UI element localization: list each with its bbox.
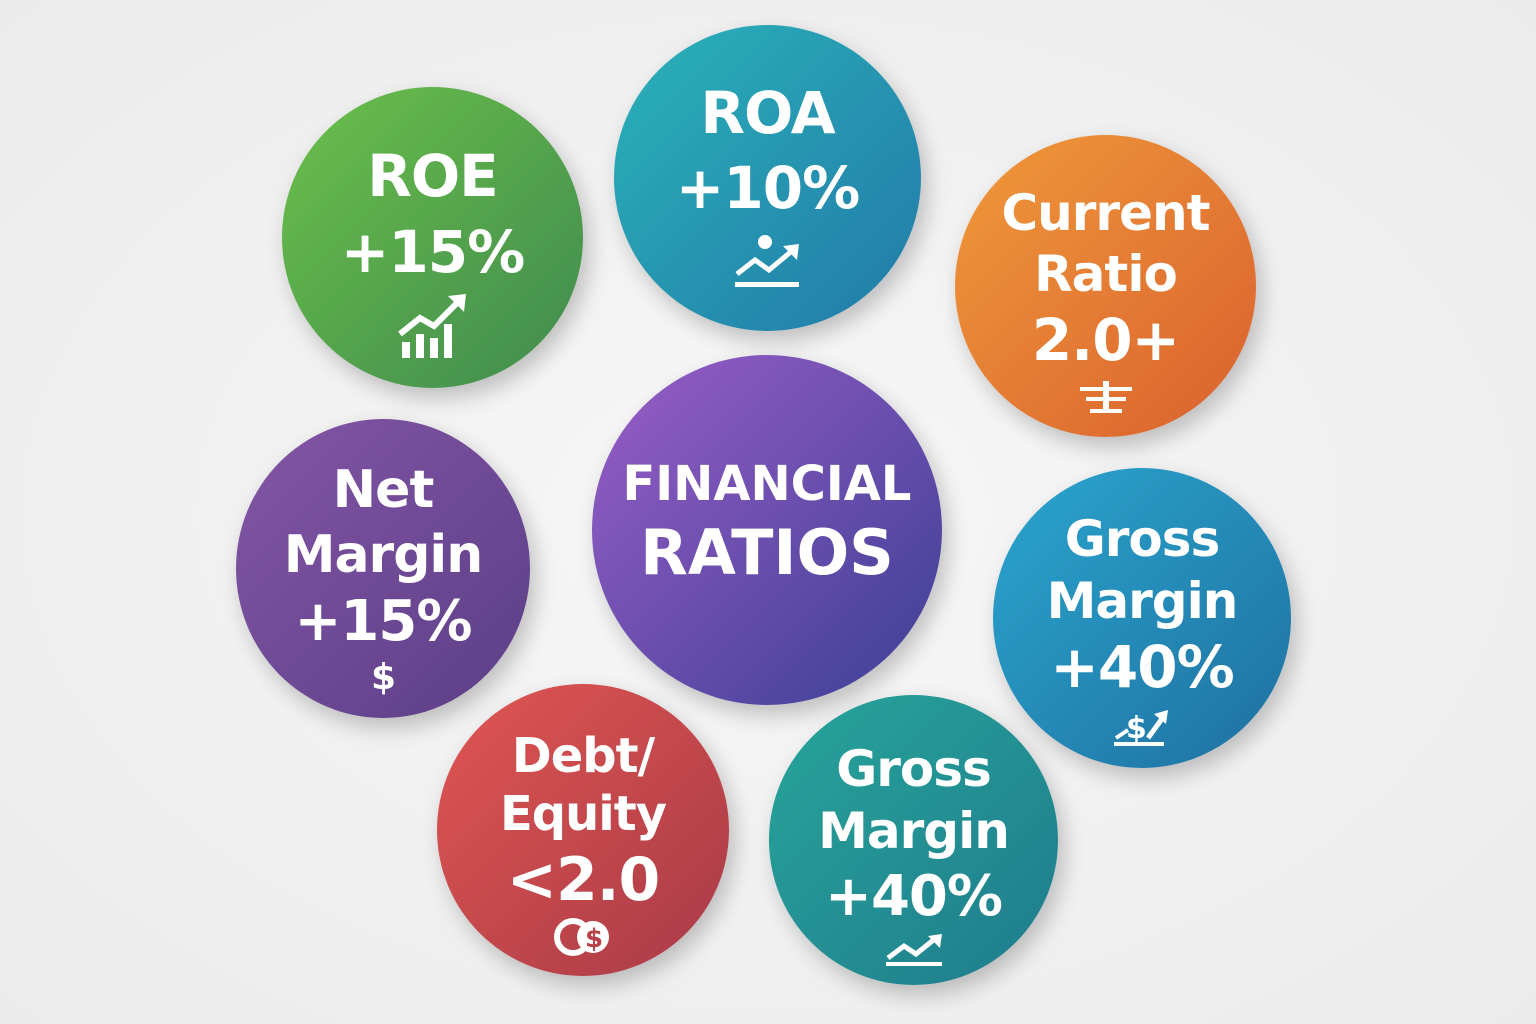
- icon: coins: $: [585, 924, 602, 954]
- text: Gross Margin +40%: Gross: [836, 740, 991, 798]
- text: Debt/Equity <2.0: Equity: [500, 786, 666, 842]
- text: Current Ratio 2.0+: Current: [1001, 184, 1210, 242]
- text: Current Ratio 2.0+: 2.0+: [1032, 306, 1179, 374]
- text: Net Margin +15%: Margin: [284, 525, 482, 585]
- title: Financial Ratios: FINANCIAL: [623, 456, 911, 512]
- text: ROE +15%: [341, 142, 524, 286]
- text: Gross Margin +40%: [818, 740, 1009, 929]
- text: Gross Margin +40%: +40%: [1050, 633, 1234, 701]
- circle: Gross Margin right: [993, 468, 1291, 768]
- text: Net Margin +15%: Net: [333, 460, 433, 520]
- icon: bar chart up: [398, 294, 466, 358]
- text: Net Margin +15%: +15%: [294, 589, 471, 654]
- text: Gross Margin +40%: Margin: [818, 802, 1009, 860]
- text: ROE +15%: +15%: [341, 218, 524, 286]
- circle: Gross Margin bottom: [769, 695, 1058, 985]
- icon: dollar: $: [371, 657, 395, 698]
- circle: ROE: [282, 87, 583, 388]
- text: Current Ratio 2.0+: [1001, 184, 1210, 374]
- text: Current Ratio 2.0+: Ratio: [1034, 245, 1177, 303]
- text: Gross Margin +40%: [1047, 510, 1237, 701]
- text: ROA +10%: +10%: [676, 154, 859, 222]
- icon: dollar arrow: $: [1126, 711, 1146, 746]
- icon: dollar arrow: [1114, 710, 1168, 746]
- text: Debt/Equity <2.0: [500, 728, 666, 915]
- text: Debt/Equity <2.0: Debt/: [512, 728, 654, 784]
- circle: Current Ratio: [955, 135, 1256, 437]
- icon: trend line: [886, 934, 942, 966]
- text: ROA +10%: [676, 79, 859, 222]
- title: Financial Ratios: [623, 456, 911, 589]
- circle: Debt/Equity: [437, 684, 729, 976]
- text: Net Margin +15%: [284, 460, 482, 654]
- text: Gross Margin +40%: Margin: [1047, 572, 1237, 630]
- text: ROE +15%: ROE: [367, 142, 498, 210]
- text: Gross Margin +40%: Gross: [1065, 510, 1219, 568]
- icon: coins: [554, 918, 609, 956]
- circle: Financial Ratios center: [592, 355, 942, 705]
- text: Debt/Equity <2.0: <2.0: [507, 845, 659, 915]
- circle: Net Margin: [236, 419, 530, 718]
- text: Gross Margin +40%: +40%: [825, 864, 1002, 929]
- title: Financial Ratios: RATIOS: [640, 516, 894, 589]
- icon: person growth: [735, 235, 799, 287]
- circle: ROA: [614, 25, 921, 331]
- text: ROA +10%: ROA: [700, 79, 835, 147]
- icon: scale: [1080, 381, 1132, 413]
